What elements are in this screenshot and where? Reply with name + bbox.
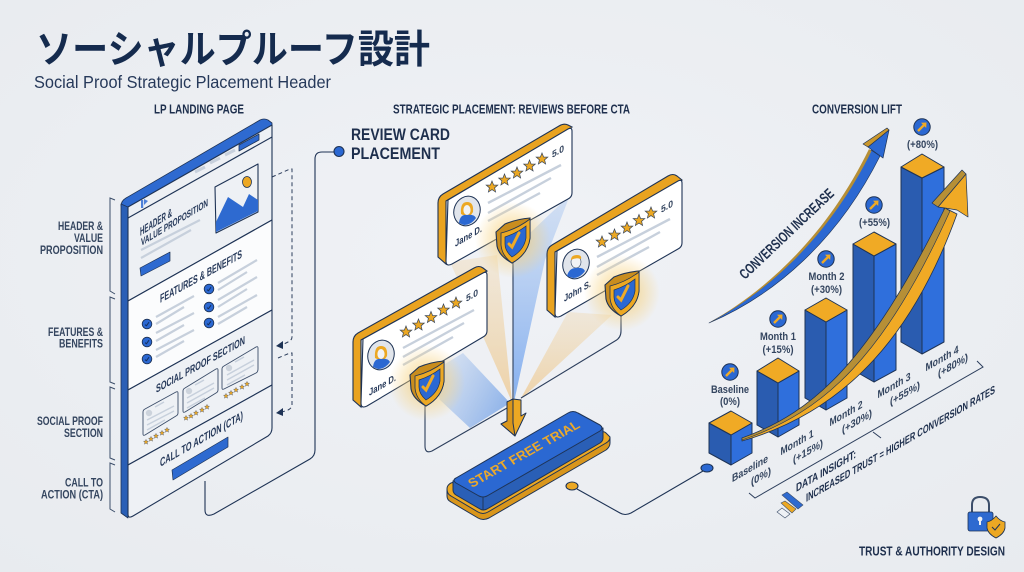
card face [361, 272, 487, 407]
nav button [239, 134, 259, 151]
arrow: conversion increase blue [709, 128, 889, 323]
reviewer name: Jane D. [369, 372, 396, 399]
section labels: FEATURES & [48, 327, 103, 339]
review lines [488, 165, 561, 221]
bar value labels [711, 119, 938, 408]
feature checks [142, 284, 214, 364]
nav line [128, 137, 272, 218]
card edge [353, 266, 487, 407]
light beams [432, 195, 612, 428]
header text: HEADER & [140, 205, 172, 239]
panel: review card top [438, 124, 572, 265]
axis labels: (+15%) [793, 436, 823, 466]
heading: LP landing page: LP LANDING PAGE [154, 102, 244, 116]
icon: trust shield top [475, 202, 551, 278]
axis labels: Baseline [732, 451, 768, 485]
section labels: CALL TO [65, 478, 103, 490]
heading: review card placement: REVIEW CARD [351, 125, 450, 144]
rating stars [596, 207, 657, 247]
CTA title: CALL TO ACTION (CTA) [160, 408, 243, 470]
rating stars [400, 297, 462, 337]
heading: conversion lift: CONVERSION LIFT [812, 102, 902, 116]
card face [555, 180, 682, 317]
section labels: SOCIAL PROOF [37, 416, 103, 428]
label: month 1 [760, 311, 796, 356]
connector: CTA to chart [566, 464, 713, 514]
axis labels: (+80%) [938, 350, 968, 380]
logo [141, 199, 148, 208]
avatar [364, 336, 398, 374]
label: month 2: (+30%) [811, 284, 842, 296]
section labels: SECTION [64, 428, 103, 440]
label: month 4: (+80%) [907, 139, 938, 151]
icon: trust shield left [389, 345, 465, 421]
label: month 3 [859, 197, 890, 229]
icon: padlock and shield [968, 497, 1005, 538]
review lines [403, 310, 474, 365]
social proof title: SOCIAL PROOF SECTION [156, 333, 245, 396]
score: 5.0 [466, 288, 478, 305]
bar: baseline [709, 411, 752, 465]
button base [447, 433, 610, 520]
mini star ratings [144, 381, 250, 444]
bar: month 2 [805, 298, 847, 410]
arrow: conversion growth gold [742, 170, 968, 441]
features section [128, 220, 272, 390]
mini review cards [143, 347, 258, 435]
axis labels [732, 342, 968, 489]
score: 5.0 [661, 199, 673, 216]
bar chart [709, 154, 944, 465]
hero image [215, 164, 258, 233]
axis labels: (+55%) [890, 378, 920, 408]
value proposition text: VALUE PROPOSITION [141, 197, 208, 249]
axis bracket [749, 361, 983, 498]
title: ソーシャルプルーフ設計 [36, 29, 430, 72]
label: month 3: (+55%) [859, 217, 890, 229]
label: month 4 [907, 119, 938, 151]
section labels [37, 221, 103, 502]
button top [454, 412, 602, 497]
bar: month 3 [853, 232, 896, 382]
review lines [597, 219, 670, 275]
conversion increase label: CONVERSION INCREASE [737, 186, 838, 283]
axis labels: Month 4 [926, 342, 959, 374]
data insight text: DATA INSIGHT: [796, 447, 856, 495]
label: baseline [711, 364, 749, 408]
bar: month 4 [901, 154, 944, 354]
heading: review card placement: PLACEMENT [351, 144, 441, 163]
axis labels: Month 2 [830, 397, 863, 429]
rating stars [486, 153, 548, 192]
dashed arrows [272, 169, 292, 416]
section labels: ACTION (CTA) [41, 490, 103, 502]
avatar [450, 192, 484, 230]
axis labels: (+30%) [842, 406, 872, 436]
page left edge [121, 204, 128, 518]
panel: review card left [353, 266, 487, 407]
panel: review card right [547, 174, 682, 317]
bar: month 1 [757, 358, 799, 437]
reviewer name: Jane D. [455, 223, 482, 250]
section labels: HEADER & [58, 221, 103, 233]
card face [446, 128, 572, 265]
CTA section [128, 385, 272, 517]
card edge [547, 174, 682, 317]
label: month 2: Month 2 [808, 271, 844, 283]
reviewer name: John S. [564, 278, 591, 305]
card edge [438, 124, 572, 264]
nav items [195, 150, 235, 172]
heading: strategic placement: STRATEGIC PLACEMENT: REVIEWS BEFORE CTA [393, 102, 630, 116]
heading: review card placement [351, 125, 450, 163]
icon: trust shield right [584, 255, 660, 331]
header button [140, 252, 170, 276]
arrow: down to CTA [501, 399, 526, 436]
section brackets [110, 198, 115, 512]
data insight text [796, 383, 995, 505]
connector: review card to page [205, 146, 344, 515]
connectors: shields to CTA [425, 260, 621, 452]
section labels: VALUE [74, 233, 103, 245]
avatar [559, 245, 593, 283]
panel: landing page [121, 119, 272, 518]
axis labels: (0%) [751, 464, 771, 489]
feature lines [156, 260, 257, 357]
section labels: PROPOSITION [40, 245, 103, 257]
features title: FEATURES & BENEFITS [160, 246, 242, 306]
label: month 1: Month 1 [760, 331, 796, 343]
social proof section [128, 310, 272, 465]
button: start free trial [447, 412, 610, 520]
label: month 1: (+15%) [762, 344, 794, 356]
button side [453, 428, 603, 510]
section labels: BENEFITS [59, 338, 103, 350]
label: baseline: (0%) [720, 396, 740, 408]
header copy lines [141, 220, 200, 258]
axis labels: Month 3 [878, 369, 911, 401]
label: month 2 [808, 251, 844, 296]
subtitle: Social Proof Strategic Placement Header [34, 72, 331, 92]
CTA button [172, 437, 228, 480]
axis labels: Month 1 [780, 426, 814, 458]
label: baseline: Baseline [711, 384, 749, 396]
score: 5.0 [552, 144, 564, 161]
icon: data insight bars [777, 492, 803, 518]
button label: START FREE TRIAL [465, 417, 583, 491]
page top bar [121, 119, 272, 207]
header section [128, 125, 272, 301]
